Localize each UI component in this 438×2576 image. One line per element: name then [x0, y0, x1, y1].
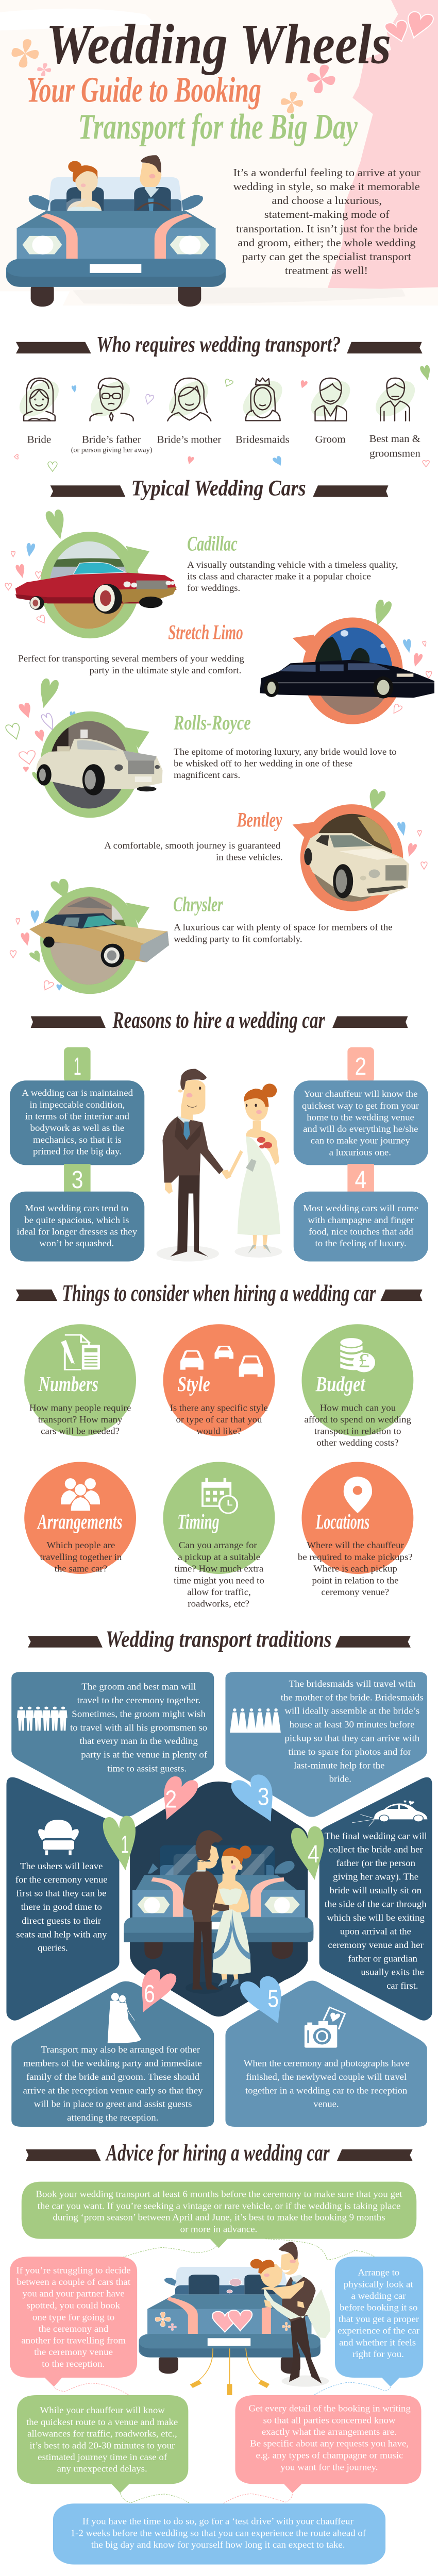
icon: kissing couple silhouette [108, 1993, 141, 2043]
card: locations: ceremony venue? [321, 1587, 389, 1597]
advice bubble: add journey time: While your chauffeur will know [40, 2405, 165, 2415]
tradition 3 panel: last-minute help for the [294, 1760, 384, 1770]
card: budget: transport in relation to [314, 1426, 401, 1436]
tradition 6 panel: family of the bride and groom. These should [26, 2072, 199, 2082]
icon: bride's mother [167, 378, 211, 421]
stretch limo text: party in the ultimate style and comfort. [89, 666, 241, 676]
bentley text: Bentley [237, 809, 282, 832]
card: arrangements: the same car? [55, 1564, 107, 1574]
tradition 3 panel [225, 1672, 427, 1817]
card: arrangements: travelling together in [40, 1552, 122, 1562]
card: numbers: Numbers [38, 1372, 98, 1396]
intro paragraph: statement-making mode of [264, 209, 390, 221]
rolls-royce text: Rolls-Royce [174, 712, 251, 735]
chrysler text [173, 893, 393, 944]
tradition 1 panel: The ushers will leave [20, 1861, 103, 1871]
reason 2 [294, 1047, 428, 1165]
tradition 6 panel: members of the wedding party and immediate [23, 2058, 202, 2069]
heart 2: 2 [165, 1786, 177, 1813]
reason 1: mechanics, so that it is [33, 1134, 122, 1145]
tradition 4 panel: car first. [386, 1980, 418, 1991]
card: timing [163, 1462, 275, 1609]
stretch limo text: Perfect for transporting several members of your wedding [18, 654, 244, 664]
cadillac text: Cadillac [187, 532, 238, 555]
heart 5 [237, 1974, 297, 2028]
car panel: bentley [293, 789, 427, 911]
advice bubble: two cars: to the reception. [42, 2359, 105, 2369]
card: style: Style [177, 1372, 210, 1396]
card: timing: roadworks, etc? [188, 1599, 249, 1609]
advice bubble: two cars: spotted, you could book [26, 2300, 121, 2311]
car panel: rolls-royce [5, 678, 163, 818]
tradition 6 panel: Transport may also be arranged for other [41, 2044, 200, 2055]
icon: flower pink small [36, 62, 53, 77]
card: locations: Locations [315, 1510, 369, 1533]
reason 3: be quite spacious, which is [24, 1215, 129, 1225]
card: style [163, 1324, 275, 1436]
tradition 1 panel: first so that they can be [16, 1888, 107, 1899]
tradition 2 panel: travel to the ceremony together. [77, 1695, 200, 1705]
advice bubble: two cars [10, 2257, 137, 2387]
banner ribbons: things to consider [16, 1290, 423, 1301]
advice bubble: two cars: the ceremony venue [34, 2347, 113, 2357]
icon: bridesmaids silhouettes [230, 1708, 281, 1733]
heart 2 [151, 1775, 201, 1823]
advice bubble: two cars: one type for going to [32, 2312, 114, 2323]
tradition 1 panel [6, 1777, 119, 2021]
card: budget: £ [358, 1350, 370, 1371]
advice bubble: test drive [53, 2503, 385, 2565]
heart 4 [290, 1826, 331, 1882]
tradition 1 panel: seats and help with any [16, 1929, 107, 1939]
advice connectors [55, 2239, 391, 2503]
card: locations: point in relation to the [312, 1575, 399, 1586]
car panel: stretch limo [260, 599, 434, 724]
reason 4: 4 [355, 1166, 366, 1193]
icon: flower peach right [279, 91, 305, 114]
people labels: groomsmen [369, 448, 420, 459]
card: numbers: transport? How many [38, 1414, 123, 1425]
central panel [130, 1782, 308, 2016]
icon: flower peach [9, 38, 41, 69]
illustration: couple holding hands [157, 1069, 282, 1262]
advice bubble: look at the car: a wedding car [351, 2291, 406, 2301]
tradition 4 panel: upon arrival at the [340, 1926, 411, 1937]
tradition 2 panel: party is at the venue in plenty of [81, 1749, 208, 1760]
people labels: Bride’s mother [157, 434, 222, 445]
advice bubble: add journey time: estimated journey time in case of [38, 2452, 167, 2462]
icon: flower pink [304, 63, 339, 95]
icon: armchair [38, 1820, 79, 1855]
section: hero header [0, 0, 438, 319]
banner ribbons: who requires [16, 342, 423, 353]
tradition 2 panel: Sometimes, the groom might wish [72, 1708, 206, 1719]
advice bubble: add journey time [17, 2395, 188, 2493]
reason 2: 2 [355, 1053, 366, 1080]
card: budget: other wedding costs? [316, 1437, 399, 1448]
advice bubble: add journey time: any unexpected delays. [57, 2464, 147, 2474]
tradition 2 panel: time to assist guests. [107, 1763, 187, 1773]
tradition 6 panel: will be in place to greet and assist guests [34, 2098, 192, 2109]
reason 1: A wedding car is maintained [22, 1088, 133, 1098]
card: numbers: How many people require [29, 1402, 131, 1413]
heart 6: 6 [144, 1980, 155, 2008]
chrysler text: wedding party to fit comfortably. [174, 935, 302, 944]
reason 2: a luxurious one. [329, 1147, 391, 1157]
card: budget: How much can you [320, 1402, 396, 1413]
scattered hearts [14, 365, 432, 471]
tradition 6 panel [11, 1981, 214, 2127]
cadillac text [187, 532, 398, 594]
tradition 3 panel: bride. [329, 1773, 351, 1784]
advice bubble: book early: or more in advance. [180, 2224, 257, 2234]
section: reasons to hire a wedding car [10, 1007, 428, 1306]
heart 3 [228, 1773, 289, 1827]
reason 3: ideal for longer dresses as they [17, 1226, 138, 1237]
people labels: (or person giving her away) [71, 446, 152, 454]
icon: camera with photo [305, 2007, 345, 2048]
reason 3: won’t be squashed. [39, 1238, 114, 1248]
stretch limo text: Stretch Limo [168, 621, 243, 643]
rolls-royce text: be whisked off to her wedding in one of these [174, 759, 352, 769]
advice bubble: two cars: you and your partner have [22, 2289, 125, 2299]
tradition 5 panel: venue. [313, 2098, 339, 2109]
heart 1 [102, 1815, 142, 1872]
advice bubble: add journey time: it’s best to add 20-30 minutes to your [29, 2441, 175, 2451]
banner ribbons: traditions [28, 1636, 411, 1648]
chrysler text: A luxurious car with plenty of space for members of the [174, 923, 393, 933]
card: timing: Can you arrange for [179, 1540, 257, 1550]
reason 1: primed for the big day. [33, 1146, 122, 1156]
advice bubble: get it in writing [235, 2395, 421, 2493]
advice bubble: look at the car: Arrange to [358, 2267, 399, 2278]
bentley text: A comfortable, smooth journey is guaranteed [104, 841, 281, 851]
intro paragraph: treatment as well! [285, 265, 368, 277]
icon: bridesmaid [246, 378, 280, 420]
tradition 1 panel: queries. [38, 1942, 68, 1953]
reason 1: in impeccable condition, [29, 1099, 125, 1110]
card: style: Is there any specific style [170, 1402, 268, 1413]
card: timing: time? How much extra [175, 1564, 263, 1574]
advice bubble: two cars: the ceremony and [39, 2324, 109, 2334]
advice bubble: two cars: If you’re struggling to decide [16, 2265, 131, 2276]
icon: groomsmen silhouettes [17, 1706, 68, 1731]
icon: best man [380, 378, 410, 421]
card: timing: Timing [177, 1510, 220, 1533]
reason 3: Most wedding cars tend to [25, 1203, 128, 1213]
intro paragraph: and choose a luxurious, [272, 195, 382, 207]
icon: vintage car with cans [352, 1801, 427, 1826]
intro paragraph [233, 167, 420, 277]
illustration: groom carrying bride by car [139, 2242, 330, 2395]
chrysler text: Chrysler [173, 893, 223, 916]
cadillac text: A visually outstanding vehicle with a timeless quality, [187, 560, 398, 570]
heart 6 [128, 1968, 179, 2016]
card: numbers: cars will be needed? [41, 1426, 120, 1436]
advice bubble: book early [22, 2182, 416, 2248]
heart 1: 1 [121, 1831, 129, 1858]
rolls-royce text: magnificent cars. [174, 771, 240, 780]
people labels: Bridesmaids [235, 434, 290, 445]
advice bubble: get it in writing: you want for the journey. [280, 2462, 378, 2472]
bentley text [104, 809, 283, 862]
illustration: couple embracing in front of car [124, 1830, 313, 1994]
card: locations: Where will the chauffeur [307, 1540, 405, 1550]
people labels: Bride’s father [82, 434, 141, 445]
card: arrangements: Arrangements [37, 1510, 122, 1533]
banner ribbons: reasons [31, 1016, 408, 1028]
tradition 5 panel [225, 1980, 427, 2127]
reason 1: bodywork as well as the [30, 1123, 124, 1133]
car panel: chrysler [10, 878, 169, 994]
tradition 1 panel: there in good time to [21, 1902, 102, 1912]
reason 3 [10, 1164, 144, 1262]
reason 1: 1 [74, 1053, 81, 1080]
tradition 4 panel [319, 1777, 432, 2021]
reason 3: 3 [72, 1166, 83, 1193]
card: timing: time might you need to [174, 1575, 264, 1586]
section: wedding transport traditions [6, 1626, 432, 2127]
banner ribbons: advice [26, 2149, 413, 2161]
rolls-royce text [174, 712, 397, 780]
tradition 6 panel: attending the reception. [67, 2112, 158, 2123]
section: rolls-royce bentley chrysler [5, 678, 427, 994]
tradition 2 panel [11, 1672, 214, 1817]
card: style: would like? [196, 1426, 241, 1436]
people labels: Best man & [369, 433, 420, 444]
heart 4: 4 [308, 1840, 319, 1868]
reason 1: in terms of the interior and [25, 1111, 129, 1122]
stretch limo text [18, 621, 244, 676]
tradition 6 panel: arrive at the reception venue early so that they [23, 2085, 203, 2095]
card: locations [298, 1462, 413, 1597]
section: advice speech bubbles and footer [10, 2182, 423, 2576]
reason 4: to the feeling of luxury. [315, 1238, 407, 1248]
section: considerations circles [24, 1324, 413, 1609]
bentley text: in these vehicles. [216, 853, 283, 862]
cadillac text: its class and character make it a popular choice [187, 571, 371, 582]
advice bubble: look at the car: right for you. [352, 2349, 404, 2359]
reason 1 [10, 1047, 144, 1165]
people labels [27, 433, 420, 459]
heart 5: 5 [267, 1985, 279, 2012]
card: numbers [24, 1324, 136, 1436]
heading: typical wedding cars: Typical Wedding Cars [131, 476, 306, 500]
illustration: bride and groom in blue car [6, 155, 226, 307]
icon: groom [315, 378, 346, 421]
advice bubble: look at the car [335, 2257, 423, 2387]
advice bubble: add journey time: allowances for traffic, roadworks, etc., [27, 2429, 177, 2439]
tradition 2 panel: to travel with all his groomsmen so [70, 1722, 207, 1733]
card: timing: allow for traffic, [187, 1587, 251, 1597]
tradition 2 panel: The groom and best man will [81, 1681, 196, 1692]
icon: linked hearts [384, 11, 435, 43]
card: locations: Where is each pickup [313, 1564, 397, 1574]
icon: bride [24, 378, 55, 421]
card: arrangements [24, 1462, 136, 1574]
card: style: or type of car that you [176, 1414, 262, 1425]
people labels: Bride [27, 434, 51, 445]
advice bubble: two cars: between a couple of cars that [17, 2277, 130, 2287]
heart 3: 3 [258, 1783, 269, 1810]
section: who requires wedding transport and typical cars [5, 332, 434, 724]
advice bubble: two cars: another for travelling from [21, 2335, 126, 2346]
advice bubble: add journey time: the quickest route to a venue and make [26, 2417, 178, 2427]
people labels: Groom [315, 433, 346, 445]
cadillac text: for weddings. [187, 583, 240, 594]
banner ribbons: typical cars [50, 485, 389, 497]
card: budget [301, 1324, 413, 1448]
blobs behind people icons [12, 375, 423, 422]
tradition 2 panel: that every man in the wedding [79, 1736, 198, 1746]
numbered hearts [102, 1773, 331, 2028]
card: arrangements: Which people are [47, 1540, 115, 1550]
section: advice banner [26, 2140, 413, 2165]
tradition 1 panel: direct guests to their [22, 1916, 102, 1926]
icon: bride's father [90, 378, 133, 421]
car panel: cadillac [5, 509, 177, 638]
card: timing: a pickup at a suitable [178, 1552, 260, 1562]
tradition 1 panel: for the ceremony venue [15, 1874, 108, 1885]
card: budget: Budget [315, 1372, 366, 1396]
reason 4 [294, 1164, 428, 1262]
